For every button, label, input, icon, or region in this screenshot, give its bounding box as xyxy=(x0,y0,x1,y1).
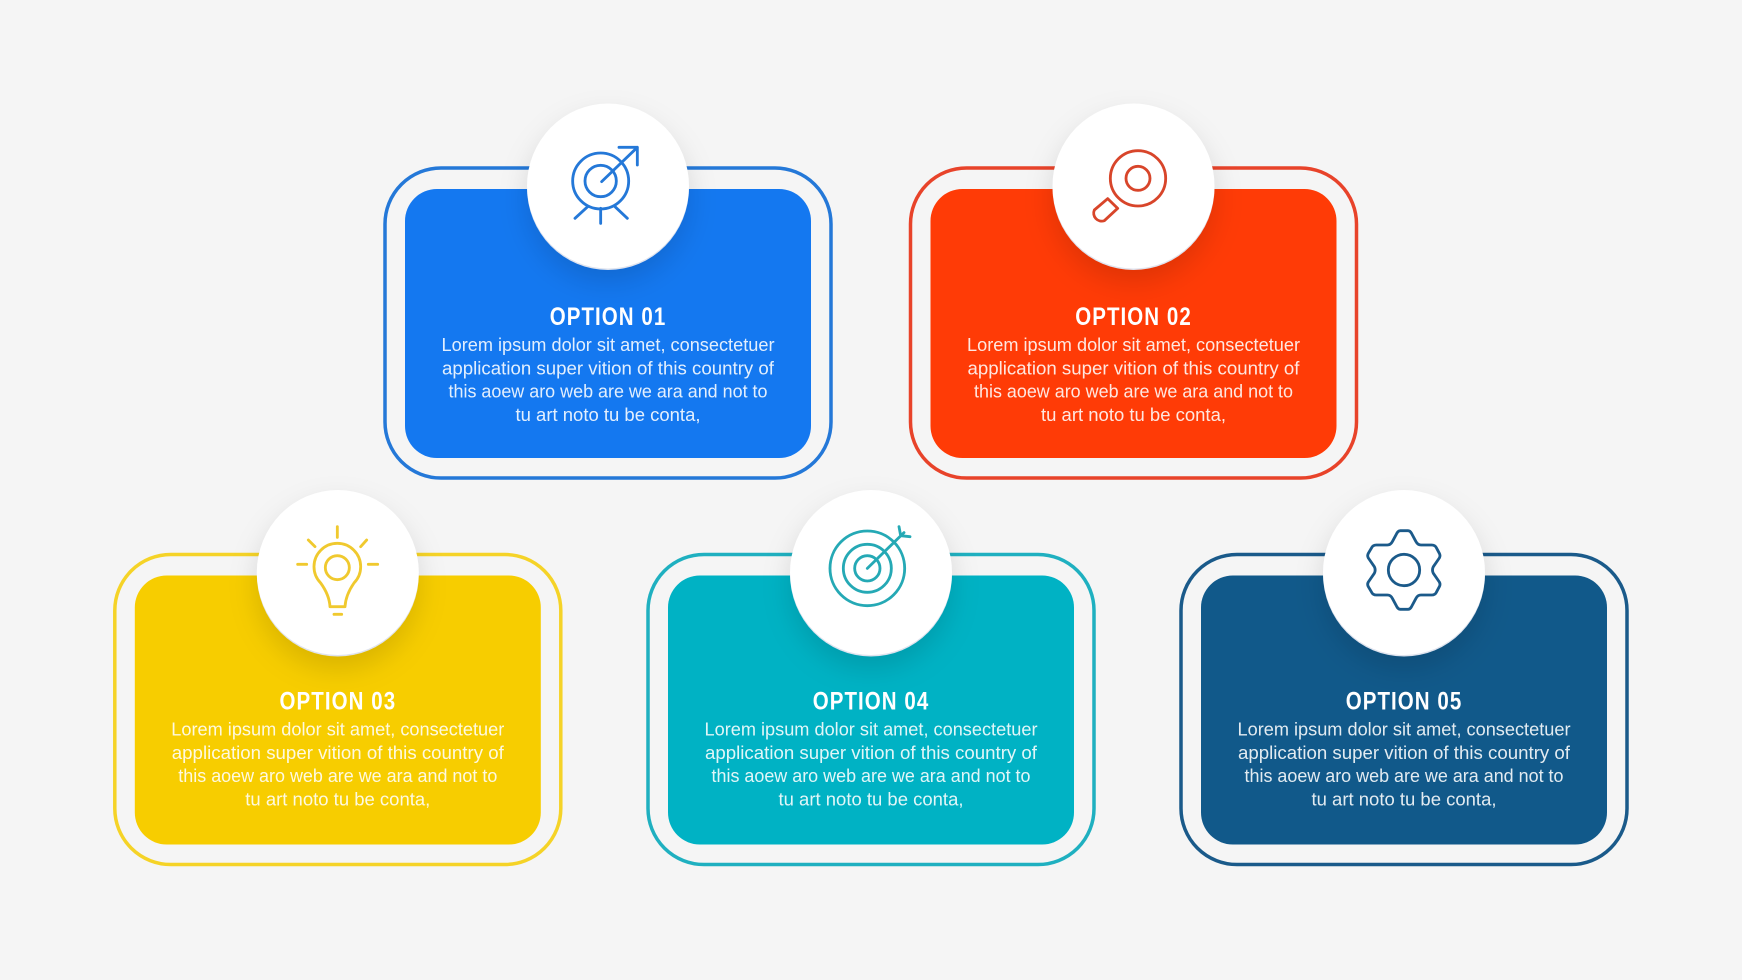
heading: option 02: OPTION 02 xyxy=(1075,302,1191,330)
panel: option 05 xyxy=(1181,490,1627,864)
text block: option 02: tu art noto tu be conta, xyxy=(1041,404,1226,425)
text block: option 03 xyxy=(171,718,505,810)
text block: option 05 xyxy=(1238,718,1571,810)
icon: target with arrow xyxy=(573,147,637,223)
heading: option 04: OPTION 04 xyxy=(813,687,929,715)
text block: option 01: application super vition of this country of xyxy=(442,357,775,378)
panel: option 03 xyxy=(115,490,561,864)
text block: option 01: tu art noto tu be conta, xyxy=(516,404,700,425)
heading: option 01: OPTION 01 xyxy=(550,302,666,330)
text block: option 05: tu art noto tu be conta, xyxy=(1312,788,1496,810)
icon: gear xyxy=(1368,531,1440,609)
icon: magnifying glass xyxy=(1094,151,1166,221)
text block: option 03: Lorem ipsum dolor sit amet, consectetuer xyxy=(171,718,504,740)
text block: option 02: Lorem ipsum dolor sit amet, consectetuer xyxy=(967,334,1300,355)
text block: option 04: tu art noto tu be conta, xyxy=(778,788,964,810)
panel: option 02 xyxy=(910,104,1356,478)
text block: option 04: application super vition of this country of xyxy=(705,742,1038,763)
text block: option 02 xyxy=(967,334,1300,425)
text block: option 03: application super vition of this country of xyxy=(172,742,505,763)
text block: option 05: application super vition of this country of xyxy=(1238,742,1571,763)
heading: option 05: OPTION 05 xyxy=(1346,687,1462,715)
text block: option 01 xyxy=(442,334,775,425)
icon: light bulb xyxy=(298,527,378,614)
text block: option 04: this aoew aro web are we ara and not to xyxy=(712,765,1030,786)
panel: option 04 xyxy=(648,490,1094,864)
heading: option 03: OPTION 03 xyxy=(279,687,395,715)
text block: option 01: Lorem ipsum dolor sit amet, consectetuer xyxy=(442,334,774,355)
text block: option 03: tu art noto tu be conta, xyxy=(245,788,430,810)
text block: option 05: Lorem ipsum dolor sit amet, consectetuer xyxy=(1238,718,1570,740)
text block: option 02: this aoew aro web are we ara and not to xyxy=(974,381,1293,402)
text block: option 04 xyxy=(704,718,1038,810)
icon: bullseye target xyxy=(830,527,910,606)
text block: option 05: this aoew aro web are we ara and not to xyxy=(1244,765,1564,786)
text block: option 01: this aoew aro web are we ara and not to xyxy=(448,381,768,402)
text block: option 03: this aoew aro web are we ara and not to xyxy=(178,765,497,786)
text block: option 02: application super vition of this country of xyxy=(968,357,1300,378)
panel: option 01 xyxy=(385,104,831,478)
text block: option 04: Lorem ipsum dolor sit amet, consectetuer xyxy=(704,718,1038,740)
